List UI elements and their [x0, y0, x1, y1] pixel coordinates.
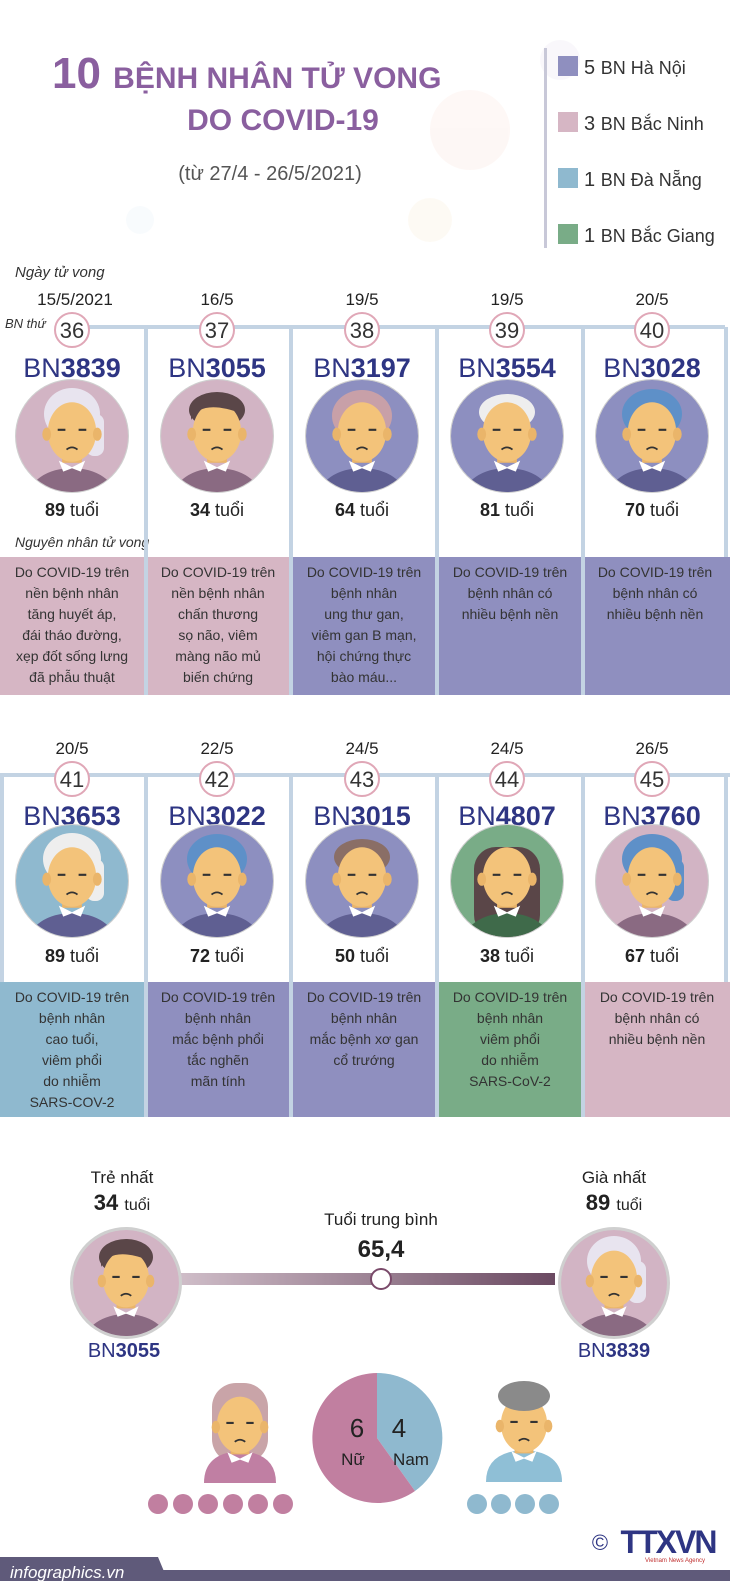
order number circles: [55, 313, 669, 796]
causes row 1: hội chứng thực: [317, 648, 411, 664]
dates row 2: 22/5: [200, 739, 234, 758]
causes row 1: nền bệnh nhân: [171, 585, 265, 601]
legend: 1 BN Đà Nẵng: [584, 169, 702, 191]
order number circles: 41: [60, 767, 84, 792]
patient IDs: BN3197: [313, 353, 411, 383]
causes row 2: Do COVID-19 trên: [307, 989, 421, 1005]
causes row 2: Do COVID-19 trên: [15, 989, 129, 1005]
causes row 2: SARS-COV-2: [30, 1094, 115, 1110]
causes row 2: mắc bệnh xơ gan: [310, 1031, 418, 1047]
causes row 1: bệnh nhân: [331, 585, 397, 601]
male dots: [467, 1494, 559, 1514]
causes row 1: đái tháo đường,: [22, 627, 122, 643]
pie chart: Nam: [393, 1450, 429, 1469]
TTXVN logo: ©: [592, 1530, 608, 1555]
causes row 1: Do COVID-19 trên: [161, 564, 275, 580]
avatars row 2: [15, 824, 709, 938]
row 1 cause boxes: [0, 557, 730, 695]
dates row 1: 16/5: [200, 290, 234, 309]
TTXVN logo: [592, 1524, 715, 1564]
causes row 2: mắc bệnh phổi: [172, 1031, 264, 1047]
background virus decorations: [126, 40, 580, 242]
oldest: 89 tuổi: [586, 1190, 642, 1215]
ages: [45, 500, 679, 966]
row labels: Ngày tử vong: [15, 264, 105, 281]
title: (từ 27/4 - 26/5/2021): [178, 163, 362, 185]
causes row 2: do nhiễm: [43, 1073, 101, 1089]
male figure: [486, 1381, 562, 1482]
youngest: Trẻ nhất: [91, 1168, 154, 1187]
ages: 67 tuổi: [625, 946, 679, 966]
ages: 89 tuổi: [45, 500, 99, 520]
title: DO COVID-19: [187, 104, 379, 137]
footer band: [0, 1557, 730, 1581]
causes row 1: xẹp đốt sống lưng: [16, 648, 128, 664]
pie chart: 6: [350, 1413, 364, 1443]
oldest: [558, 1168, 670, 1372]
patient IDs: BN3015: [313, 801, 411, 831]
legend: 1 BN Bắc Giang: [584, 225, 715, 247]
ages: 64 tuổi: [335, 500, 389, 520]
ages: 34 tuổi: [190, 500, 244, 520]
TTXVN logo: Vietnam News Agency: [645, 1558, 705, 1564]
causes row 1: nhiều bệnh nền: [462, 606, 558, 622]
causes row 2: SARS-CoV-2: [469, 1073, 551, 1089]
legend: 5 BN Hà Nội: [584, 57, 686, 79]
ages: 72 tuổi: [190, 946, 244, 966]
oldest: BN3839: [578, 1340, 650, 1362]
causes row 2: tắc nghẽn: [187, 1052, 249, 1068]
causes row 1: bệnh nhân có: [613, 585, 698, 601]
dates row 2: 20/5: [55, 739, 89, 758]
causes row 1: màng não mủ: [175, 648, 261, 664]
youngest: [70, 1168, 182, 1372]
patient IDs: BN3653: [23, 801, 121, 831]
ages: 50 tuổi: [335, 946, 389, 966]
causes row 1: ung thư gan,: [324, 606, 404, 622]
causes row 2: viêm phổi: [480, 1031, 540, 1047]
causes row 1: Do COVID-19 trên: [15, 564, 129, 580]
causes row 1: đã phẫu thuật: [29, 669, 115, 685]
timeline grid row 1: [72, 327, 726, 695]
causes row 1: nhiều bệnh nền: [607, 606, 703, 622]
patient IDs: BN3839: [23, 353, 121, 383]
causes row 1: Do COVID-19 trên: [453, 564, 567, 580]
causes row 1: viêm gan B mạn,: [311, 627, 417, 643]
female dots: [148, 1494, 293, 1514]
avatars row 1: [15, 379, 709, 493]
causes row 1: nền bệnh nhân: [25, 585, 119, 601]
order number circles: 36: [60, 318, 84, 343]
youngest: BN3055: [88, 1340, 160, 1362]
timeline grid row 2: [0, 775, 730, 1117]
row labels: Nguyên nhân tử vong: [15, 534, 149, 550]
dates row 2: 24/5: [345, 739, 379, 758]
causes row 2: cao tuổi,: [46, 1031, 98, 1047]
dates row 1: 20/5: [635, 290, 669, 309]
causes row 1: Do COVID-19 trên: [307, 564, 421, 580]
causes row 2: bệnh nhân: [39, 1010, 105, 1026]
causes row 1: biến chứng: [183, 669, 253, 685]
patient IDs: BN3554: [458, 353, 556, 383]
patient IDs: BN3022: [168, 801, 266, 831]
causes row 1: tăng huyết áp,: [28, 606, 116, 622]
causes row 2: cổ trướng: [333, 1052, 395, 1068]
age range bar: Tuổi trung bình: [324, 1210, 438, 1229]
title: [52, 49, 441, 185]
causes row 2: Do COVID-19 trên: [161, 989, 275, 1005]
dates row 2: 24/5: [490, 739, 524, 758]
row labels: BN thứ: [5, 316, 47, 331]
dates row 2: 26/5: [635, 739, 669, 758]
female figure: [204, 1383, 276, 1483]
causes row 1: bào máu...: [331, 669, 397, 685]
age range bar: 65,4: [358, 1236, 405, 1263]
legend: 3 BN Bắc Ninh: [584, 113, 704, 135]
pie chart: 4: [392, 1413, 406, 1443]
ages: 70 tuổi: [625, 500, 679, 520]
order number circles: 45: [640, 767, 664, 792]
dates row 2: [55, 739, 669, 758]
pie chart: Nữ: [341, 1450, 365, 1469]
causes row 2: viêm phổi: [42, 1052, 102, 1068]
legend: [544, 48, 715, 248]
causes row 2: bệnh nhân: [477, 1010, 543, 1026]
causes row 2: Do COVID-19 trên: [453, 989, 567, 1005]
causes row 2: do nhiễm: [481, 1052, 539, 1068]
patient IDs: BN3055: [168, 353, 266, 383]
oldest: Già nhất: [582, 1168, 646, 1187]
causes row 2: bệnh nhân: [185, 1010, 251, 1026]
row labels: [5, 264, 149, 550]
causes row 2: bệnh nhân: [331, 1010, 397, 1026]
causes row 2: Do COVID-19 trên: [600, 989, 714, 1005]
order number circles: 42: [205, 767, 229, 792]
order number circles: 39: [495, 318, 519, 343]
order number circles: 37: [205, 318, 229, 343]
ages: 38 tuổi: [480, 946, 534, 966]
dates row 1: 15/5/2021: [37, 290, 113, 309]
order number circles: 40: [640, 318, 664, 343]
youngest: 34 tuổi: [94, 1190, 150, 1215]
row 2 cause boxes: [0, 982, 730, 1117]
patient IDs: BN4807: [458, 801, 556, 831]
causes row 1: bệnh nhân có: [468, 585, 553, 601]
dates row 1: 19/5: [345, 290, 379, 309]
causes row 2: bệnh nhân có: [615, 1010, 700, 1026]
dates row 1: 19/5: [490, 290, 524, 309]
causes row 2: mãn tính: [191, 1073, 245, 1089]
order number circles: 43: [350, 767, 374, 792]
causes row 2: [15, 989, 714, 1110]
title: 10 BỆNH NHÂN TỬ VONG: [52, 49, 441, 98]
patient IDs: [23, 353, 701, 831]
causes row 1: chấn thương: [178, 606, 258, 622]
dates row 1: [37, 290, 669, 309]
order number circles: 44: [495, 767, 519, 792]
causes row 1: [15, 564, 712, 685]
causes row 1: sọ não, viêm: [178, 627, 258, 643]
patient IDs: BN3028: [603, 353, 701, 383]
ages: 81 tuổi: [480, 500, 534, 520]
pie chart: [312, 1373, 442, 1503]
causes row 2: nhiều bệnh nền: [609, 1031, 705, 1047]
TTXVN logo: TTXVN: [621, 1524, 715, 1560]
age range bar: [180, 1210, 555, 1289]
ages: 89 tuổi: [45, 946, 99, 966]
patient IDs: BN3760: [603, 801, 701, 831]
causes row 1: Do COVID-19 trên: [598, 564, 712, 580]
order number circles: 38: [350, 318, 374, 343]
